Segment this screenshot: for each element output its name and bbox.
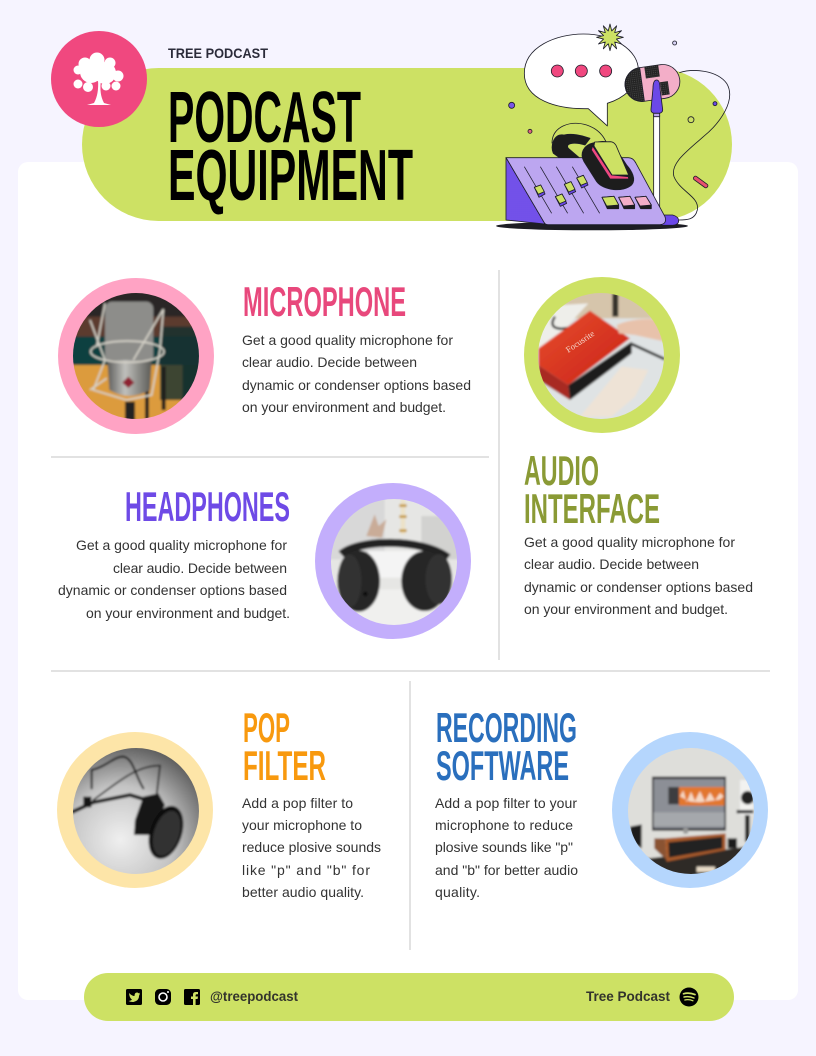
recording software heading: RECORDING xyxy=(436,704,577,751)
recording software text: Add a pop filter to your xyxy=(435,795,577,811)
audio interface text: clear audio. Decide between xyxy=(524,556,699,572)
audio interface text: Get a good quality microphone for xyxy=(524,534,735,550)
ear cup xyxy=(582,141,634,190)
mixer buttons xyxy=(602,196,651,209)
headphones text: dynamic or condenser options based xyxy=(58,582,287,598)
headphones text xyxy=(58,537,290,621)
pop filter heading: POP xyxy=(243,704,290,751)
audio interface photo xyxy=(524,277,680,433)
audio interface text: dynamic or condenser options based xyxy=(524,579,753,595)
footer bar xyxy=(84,973,734,1021)
title: EQUIPMENT xyxy=(168,136,413,216)
audio interface heading xyxy=(524,447,660,532)
mic head xyxy=(623,62,682,104)
microphone text: dynamic or condenser options based xyxy=(242,377,471,393)
mic clip xyxy=(651,80,663,113)
title xyxy=(168,78,413,216)
microphone text: clear audio. Decide between xyxy=(242,354,417,370)
pop filter text: Add a pop filter to xyxy=(242,795,353,811)
headphones text: Get a good quality microphone for xyxy=(76,537,287,553)
recording software text: microphone to reduce xyxy=(435,817,573,833)
mixer shadow xyxy=(496,222,688,230)
microphone text: on your environment and budget. xyxy=(242,399,446,415)
headphones photo xyxy=(315,483,471,639)
icon: twitter xyxy=(126,989,142,1005)
recording software text: and "b" for better audio xyxy=(435,862,578,878)
pop filter text: better audio quality. xyxy=(242,884,364,900)
speech bubble xyxy=(524,34,638,126)
pop filter text: like "p" and "b" for xyxy=(242,862,370,878)
faders xyxy=(524,167,600,213)
recording software heading xyxy=(436,704,577,789)
headphones text: on your environment and budget. xyxy=(86,605,290,621)
white content panel xyxy=(18,162,798,1000)
pop filter heading xyxy=(243,704,326,789)
mixer body xyxy=(506,158,666,225)
recording software photo xyxy=(612,732,768,888)
cable xyxy=(673,71,730,220)
pop filter text xyxy=(242,795,381,900)
brand name: TREE PODCAST xyxy=(168,45,268,61)
headphones text: clear audio. Decide between xyxy=(113,560,287,576)
audio interface heading: AUDIO xyxy=(524,447,599,494)
title: PODCAST xyxy=(168,78,361,158)
logo: tree badge xyxy=(51,31,147,127)
mic stand xyxy=(654,115,660,208)
microphone photo xyxy=(58,278,214,434)
header banner xyxy=(82,68,732,221)
microphone heading: MICROPHONE xyxy=(243,278,406,325)
dividers xyxy=(51,270,770,950)
handle: @treepodcast xyxy=(210,988,298,1004)
mixer foot xyxy=(662,215,679,225)
icon: spotify xyxy=(680,988,698,1006)
section: microphone xyxy=(58,278,471,434)
section: recording software xyxy=(435,704,768,900)
recording software text: quality. xyxy=(435,884,480,900)
microphone text xyxy=(242,332,471,415)
audio interface text: on your environment and budget. xyxy=(524,601,728,617)
headphones xyxy=(552,123,607,143)
pop filter heading: FILTER xyxy=(243,742,326,789)
microphone text: Get a good quality microphone for xyxy=(242,332,453,348)
audio interface heading: INTERFACE xyxy=(524,485,660,532)
headphones heading: HEADPHONES xyxy=(125,483,290,530)
pop filter text: reduce plosive sounds xyxy=(242,839,381,855)
icon: instagram xyxy=(155,989,171,1005)
audio interface text xyxy=(524,534,753,617)
burst xyxy=(597,24,623,51)
pop filter text: your microphone to xyxy=(242,817,362,833)
dots in bubble xyxy=(551,65,612,77)
pop filter photo xyxy=(57,732,213,888)
confetti xyxy=(673,41,677,45)
icon: facebook xyxy=(184,989,200,1005)
audio interface photo: Focusrite xyxy=(564,328,596,355)
recording software heading: SOFTWARE xyxy=(436,742,569,789)
section: headphones xyxy=(58,483,471,639)
recording software text xyxy=(435,795,578,900)
section: pop filter xyxy=(57,704,381,900)
recording software text: plosive sounds like "p" xyxy=(435,839,573,855)
podcast name: Tree Podcast xyxy=(586,988,670,1004)
mixer side xyxy=(506,158,545,224)
illustration: podcast studio xyxy=(496,24,730,230)
section: audio interface xyxy=(524,277,753,617)
